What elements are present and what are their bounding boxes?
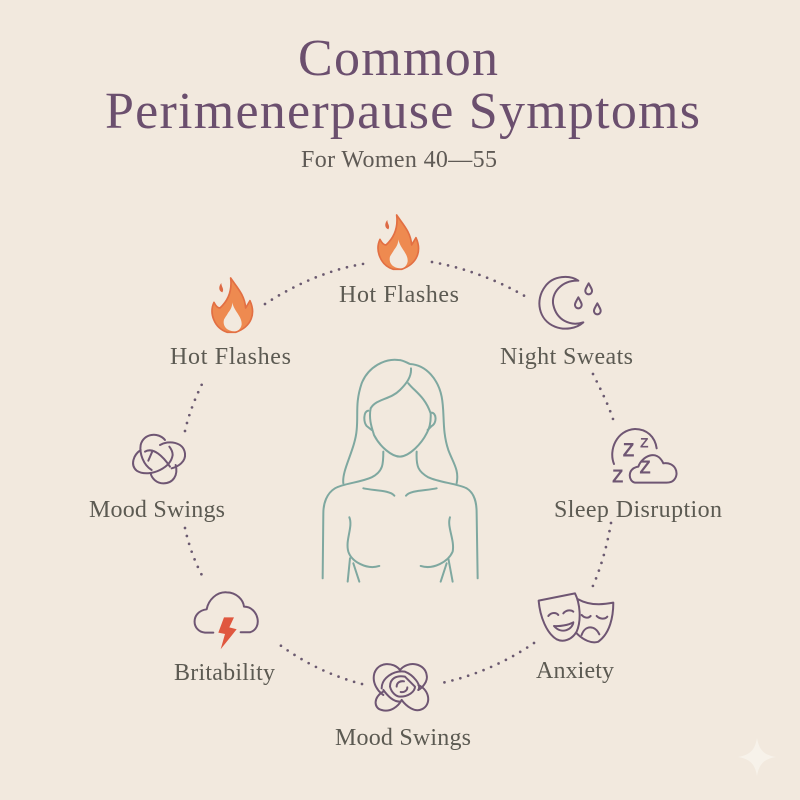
label: irritability: Britability: [174, 660, 275, 686]
dotted ring connectors: [185, 262, 613, 684]
label: anxiety: Anxiety: [536, 658, 614, 684]
subtitle: For Women 40—55: [301, 147, 497, 173]
label: sleep disruption: Sleep Disruption: [554, 497, 722, 523]
label: night sweats: Night Sweats: [500, 344, 633, 370]
label: mood swings bottom: Mood Swings: [335, 725, 471, 751]
icon: moon and droplets: [539, 277, 601, 329]
label: mood swings left: Mood Swings: [89, 497, 225, 523]
sparkle mark: [738, 738, 776, 776]
icon: knot left: [133, 435, 185, 483]
icon: sleep cloud: Z: [639, 456, 651, 477]
title: Common: [298, 30, 498, 87]
icon: knot bottom: [374, 664, 428, 711]
icon: sleep cloud: Z: [640, 435, 649, 451]
label: hot flashes left: Hot Flashes: [170, 344, 291, 370]
icon: sleep cloud: [612, 429, 677, 487]
icon: sleep cloud: Z: [623, 441, 635, 462]
icon: theatre masks: [539, 593, 613, 642]
central woman figure: [323, 360, 478, 582]
icon: flame top: [378, 215, 419, 269]
icon: sleep cloud: Z: [612, 466, 623, 487]
label: hot flashes top: Hot Flashes: [339, 282, 459, 308]
title: Perimenerpause Symptoms: [105, 83, 700, 140]
icon: flame left: [212, 278, 253, 332]
title: [105, 30, 700, 140]
icon: storm cloud with bolt: [195, 592, 258, 649]
